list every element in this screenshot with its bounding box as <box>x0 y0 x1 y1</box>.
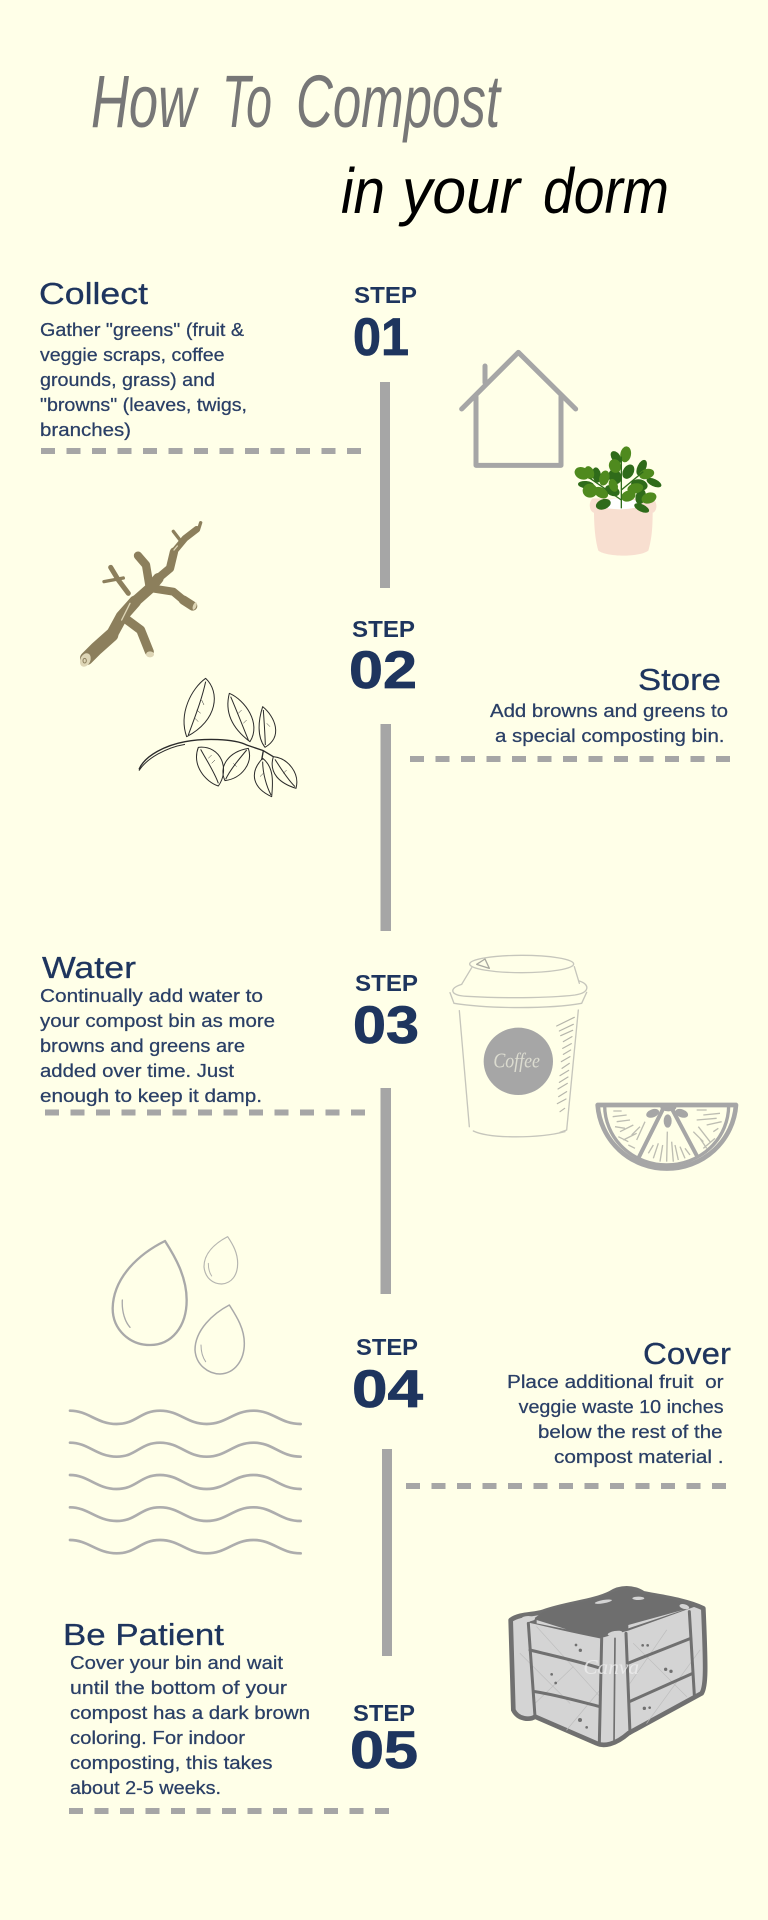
step 3 label: 03 <box>353 996 419 1055</box>
heading: store: Store <box>638 662 721 697</box>
title: dorm <box>543 155 669 227</box>
text: water description: your compost bin as more <box>40 1011 275 1031</box>
step 3: water <box>40 950 419 1112</box>
step 1 label <box>353 282 417 367</box>
title: To <box>222 60 272 143</box>
step 5: be patient <box>63 1617 418 1811</box>
text: water description: enough to keep it damp. <box>40 1086 262 1106</box>
text: cover description: below the rest of the <box>538 1422 722 1442</box>
text: store description: Add browns and greens to <box>490 701 728 721</box>
step 2: store <box>349 616 730 759</box>
step 5 label <box>350 1700 418 1780</box>
icon: leaf sprig <box>139 678 297 797</box>
text: cover description <box>507 1372 724 1467</box>
timeline bars <box>380 382 392 1656</box>
coffee label <box>484 1028 553 1095</box>
coffee label: Coffee <box>493 1049 540 1073</box>
text: collect description <box>40 320 247 440</box>
icon: branch <box>78 523 201 668</box>
icon: water waves <box>70 1411 301 1553</box>
title: in <box>341 155 385 227</box>
icon: water drops <box>113 1237 244 1374</box>
text: be patient description: compost has a dark brown <box>70 1703 310 1723</box>
text: cover description: Place additional fruit or <box>507 1372 724 1392</box>
step 1 label: 01 <box>353 308 409 367</box>
heading: be patient: Be Patient <box>63 1617 224 1652</box>
text: cover description: compost material . <box>554 1447 724 1467</box>
text: collect description: "browns" (leaves, twigs, <box>40 395 247 415</box>
text: be patient description <box>70 1653 310 1798</box>
title: your <box>398 155 523 227</box>
heading: cover: Cover <box>643 1336 731 1371</box>
step 4: cover <box>352 1334 731 1486</box>
text: cover description: veggie waste 10 inches <box>519 1397 724 1417</box>
heading: water: Water <box>42 950 136 985</box>
title: How <box>91 60 199 143</box>
text: collect description: grounds, grass) and <box>40 370 215 390</box>
step 2 label: STEP <box>352 616 415 642</box>
step 4 label: 04 <box>352 1360 424 1419</box>
step 2 label <box>349 616 417 700</box>
step 1: collect <box>39 276 417 451</box>
text: store description <box>490 701 728 746</box>
step 2 label: 02 <box>349 641 417 700</box>
text: be patient description: until the bottom of your <box>70 1678 287 1698</box>
step 1 label: STEP <box>354 282 417 308</box>
title <box>91 60 669 227</box>
text: collect description: Gather "greens" (fruit & <box>40 320 244 340</box>
text: be patient description: Cover your bin and wait <box>70 1653 283 1673</box>
step 4 label: STEP <box>356 1334 418 1360</box>
text: store description: a special composting bin. <box>495 726 724 746</box>
text: water description: browns and greens are <box>40 1036 245 1056</box>
icon: compost crate <box>511 1588 705 1745</box>
text: be patient description: composting, this takes <box>70 1753 272 1773</box>
step 5 label: 05 <box>350 1721 418 1780</box>
step 3 label <box>353 970 419 1055</box>
text: water description <box>40 986 275 1106</box>
icon: citrus slice <box>598 1103 736 1169</box>
text: water description: added over time. Just <box>40 1061 234 1081</box>
title: Compost <box>296 60 502 143</box>
text: water description: Continually add water to <box>40 986 263 1006</box>
step 5 label: STEP <box>353 1700 415 1726</box>
step 4 label <box>352 1334 424 1419</box>
icon: potted plant <box>573 446 663 556</box>
heading: collect: Collect <box>39 276 148 311</box>
icon: compost crate: Canva <box>583 1655 639 1679</box>
text: collect description: veggie scraps, coffee <box>40 345 224 365</box>
icon: house <box>462 352 576 465</box>
text: be patient description: coloring. For indoor <box>70 1728 245 1748</box>
step 3 label: STEP <box>355 970 418 996</box>
icon: coffee cup <box>450 955 587 1137</box>
text: be patient description: about 2-5 weeks. <box>70 1778 221 1798</box>
text: collect description: branches) <box>40 420 131 440</box>
